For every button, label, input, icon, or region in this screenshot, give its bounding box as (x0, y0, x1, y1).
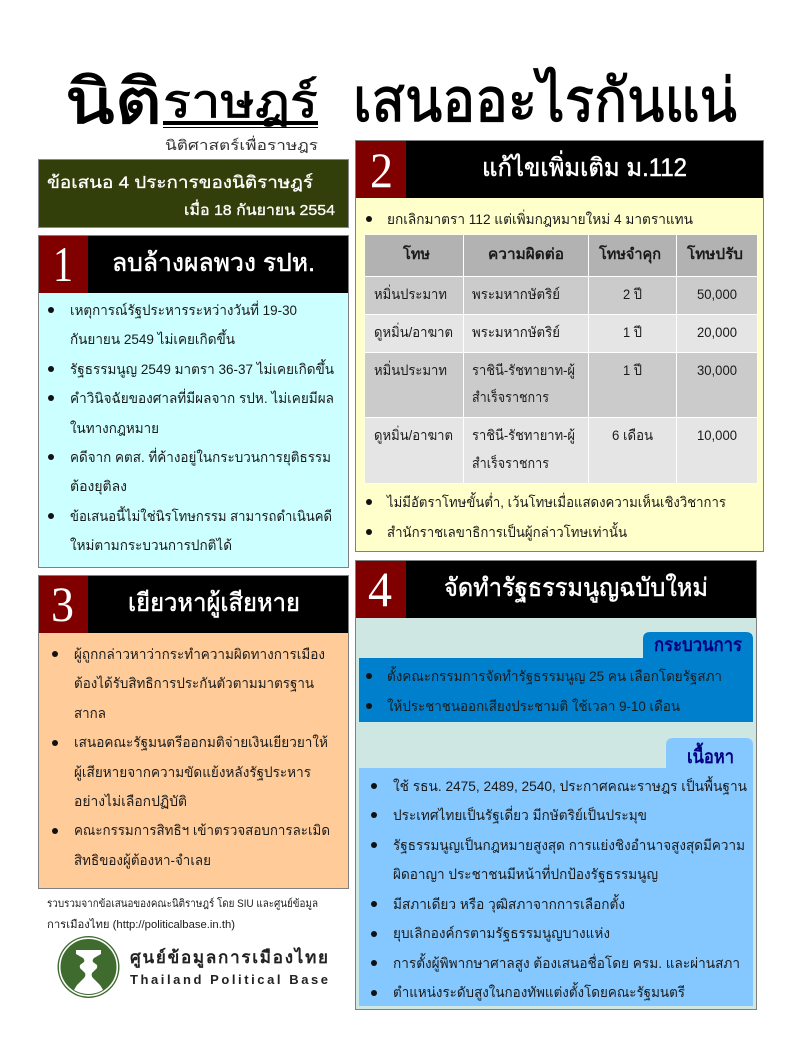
text block: bullets 1: คดีจาก คตส. ที่ค้างอยู่ในกระบวนการยุติธรรม (70, 448, 331, 466)
text block: closing bullets: ไม่มีอัตราโทษขั้นต่ำ, เว้นโทษเมื่อแสดงความเห็นเชิงวิชาการ (386, 492, 726, 510)
table: penalties: 2 ปี (623, 286, 642, 302)
heading: 4: 4 (368, 561, 392, 617)
table: penalties: 30,000 (697, 362, 737, 378)
sub-panel: process: ตั้งคณะกรรมการจัดทำรัฐธรรมนูญ 25 คน เลือกโดยรัฐสภา (387, 666, 722, 685)
table: penalties: 1 ปี (623, 362, 642, 378)
sub-panel: content (359, 738, 753, 1006)
table: penalties: ราชินี-รัชทายาท-ผู้ (472, 362, 575, 379)
title: เสนออะไรกันแน่ (353, 66, 737, 134)
panel: proposal date banner (38, 160, 348, 228)
table: penalties: สำเร็จราชการ (472, 454, 549, 471)
table: penalties: สำเร็จราชการ (472, 388, 549, 405)
text block: bullets 3: ผู้ถูกกล่าวหาว่ากระทำความผิดทางการเมือง (74, 646, 325, 663)
text block: source credit: รวบรวมจากข้อเสนอของคณะนิติราษฎร์ โดย SIU และศูนย์ข้อมูล (47, 896, 318, 910)
sub-panel: content: ผิดอาญา ประชาชนมีหน้าที่ปกป้องรัฐธรรมนูญ (393, 865, 658, 883)
text block: bullets 3: คณะกรรมการสิทธิฯ เข้าตรวจสอบการละเมิด (74, 822, 330, 838)
sub-panel: content: การตั้งผู้พิพากษาศาลสูง ต้องเสนอชื่อโดย ครม. และผ่านสภา (393, 953, 740, 972)
text block: bullets 1: ต้องยุติลง (70, 478, 127, 495)
heading: 3: เยียวหาผู้เสียหาย (128, 589, 300, 618)
text block: logo wordmark (130, 947, 328, 987)
table: penalties: 6 เดือน (612, 427, 653, 443)
text block: bullets 1 (48, 301, 334, 553)
text block: bullets 3: ต้องได้รับสิทธิการประกันตัวตามมาตรฐาน (74, 675, 314, 692)
table: penalties: หมิ่นประมาท (374, 361, 447, 378)
table: penalties: 50,000 (697, 286, 737, 302)
table: penalties: 1 ปี (623, 324, 642, 340)
text block: intro bullet: ยกเลิกมาตรา 112 แต่เพิ่มกฎหมายใหม่ 4 มาตราแทน (387, 210, 693, 227)
heading: 3: 3 (51, 576, 74, 632)
panel: proposal date banner: ข้อเสนอ 4 ประการของนิติราษฎร์ (47, 173, 313, 192)
sub-panel: content: เนื้อหา (687, 742, 734, 768)
text block: bullets 1: ใหม่ตามกระบวนการปกติได้ (70, 537, 232, 553)
text block: bullets 1: ข้อเสนอนี้ไม่ใช่นิรโทษกรรม สามารถดำเนินคดี (70, 506, 332, 524)
table: penalties: โทษปรับ (686, 244, 743, 263)
text block: source credit: การเมืองไทย (http://politicalbase.in.th) (47, 918, 235, 931)
sub-panel: process: ให้ประชาชนออกเสียงประชามติ ใช้เวลา 9-10 เดือน (387, 698, 680, 714)
title: ราษฎร์ (163, 76, 318, 127)
text block: bullets 3: สิทธิของผู้ต้องหา-จำเลย (74, 852, 211, 869)
title (65, 66, 737, 137)
panel: 2 (356, 140, 764, 552)
icon: Thailand Political Base logo (58, 936, 120, 998)
text block: bullets 1: กันยายน 2549 ไม่เคยเกิดขึ้น (70, 329, 235, 347)
text block: bullets 3: เสนอคณะรัฐมนตรีออกมติจ่ายเงินเยียวยาให้ (74, 734, 328, 751)
table: penalties: โทษจำคุก (598, 244, 661, 264)
sub-panel: content: ประเทศไทยเป็นรัฐเดี่ยว มีกษัตริย์เป็นประมุข (393, 806, 647, 824)
text block: source credit (47, 896, 318, 931)
table: penalties: ความผิดต่อ (488, 245, 564, 263)
table: penalties: ราชินี-รัชทายาท-ผู้ (472, 427, 575, 444)
text block: bullets 1: รัฐธรรมนูญ 2549 มาตรา 36-37 ไม่เคยเกิดขึ้น (70, 359, 334, 378)
sub-panel: content: รัฐธรรมนูญเป็นกฎหมายสูงสุด การแย่งชิงอำนาจสูงสุดมีความ (393, 836, 745, 854)
heading: 1 (39, 236, 348, 293)
table: penalties: 20,000 (697, 324, 737, 340)
text block: logo wordmark: ศูนย์ข้อมูลการเมืองไทย (130, 947, 328, 969)
heading: 4: จัดทำรัฐธรรมนูญฉบับใหม่ (444, 573, 708, 603)
table: penalties: หมิ่นประมาท (374, 285, 447, 302)
text block: closing bullets (366, 492, 726, 541)
subtitle: tagline: นิติศาสตร์เพื่อราษฎร (165, 136, 319, 153)
text block: bullets 1: ในทางกฎหมาย (70, 420, 159, 436)
table: penalties: พระมหากษัตริย์ (472, 324, 560, 340)
table: penalties: ดูหมิ่น/อาฆาต (374, 426, 453, 444)
heading: 3 (39, 576, 348, 633)
table: penalties: ดูหมิ่น/อาฆาต (374, 323, 453, 341)
sub-panel: process (359, 632, 753, 722)
heading: 1: 1 (53, 236, 73, 292)
text block: bullets 3 (52, 646, 330, 869)
sub-panel: content: มีสภาเดียว หรือ วุฒิสภาจากการเลือกตั้ง (393, 894, 625, 913)
heading: 1: ลบล้างผลพวง รปห. (112, 249, 315, 277)
heading: 2: แก้ไขเพิ่มเติม ม.112 (482, 150, 687, 182)
heading: 2 (356, 141, 763, 198)
text block: bullets 3: สากล (74, 705, 106, 721)
table: penalties: พระมหากษัตริย์ (472, 286, 560, 302)
title: นิติ (65, 68, 162, 137)
sub-panel: process: กระบวนการ (654, 635, 743, 656)
panel: 4 (356, 560, 756, 1010)
text block: bullets 3: ผู้เสียหายจากความขัดแย้งหลังรัฐประหาร (74, 764, 311, 781)
table: penalties: โทษ (402, 244, 430, 263)
text block: bullets 3: อย่างไม่เลือกปฏิบัติ (74, 793, 187, 809)
table: penalties: 10,000 (697, 427, 737, 443)
panel: 1 (38, 236, 348, 568)
text block: bullets 1: คำวินิจฉัยของศาลที่มีผลจาก รปห. ไม่เคยมีผล (70, 389, 334, 406)
heading: 2: 2 (370, 142, 393, 198)
table: penalties (364, 234, 758, 484)
text block: logo wordmark: Thailand Political Base (130, 972, 328, 987)
heading: 4 (356, 561, 756, 618)
sub-panel: content: ตำแหน่งระดับสูงในกองทัพแต่งตั้งโดยคณะรัฐมนตรี (393, 982, 685, 1001)
sub-panel: content: ใช้ รธน. 2475, 2489, 2540, ประกาศคณะราษฎร เป็นพื้นฐาน (393, 776, 747, 795)
text block: bullets 1: เหตุการณ์รัฐประหารระหว่างวันที่ 19-30 (70, 301, 297, 319)
sub-panel: content: ยุบเลิกองค์กรตามรัฐธรรมนูญบางแห่ง (393, 925, 610, 942)
panel: proposal date banner: เมื่อ 18 กันยายน 2554 (184, 199, 335, 219)
panel: 3 (38, 576, 348, 888)
text block: closing bullets: สำนักราชเลขาธิการเป็นผู้กล่าวโทษเท่านั้น (387, 522, 627, 541)
